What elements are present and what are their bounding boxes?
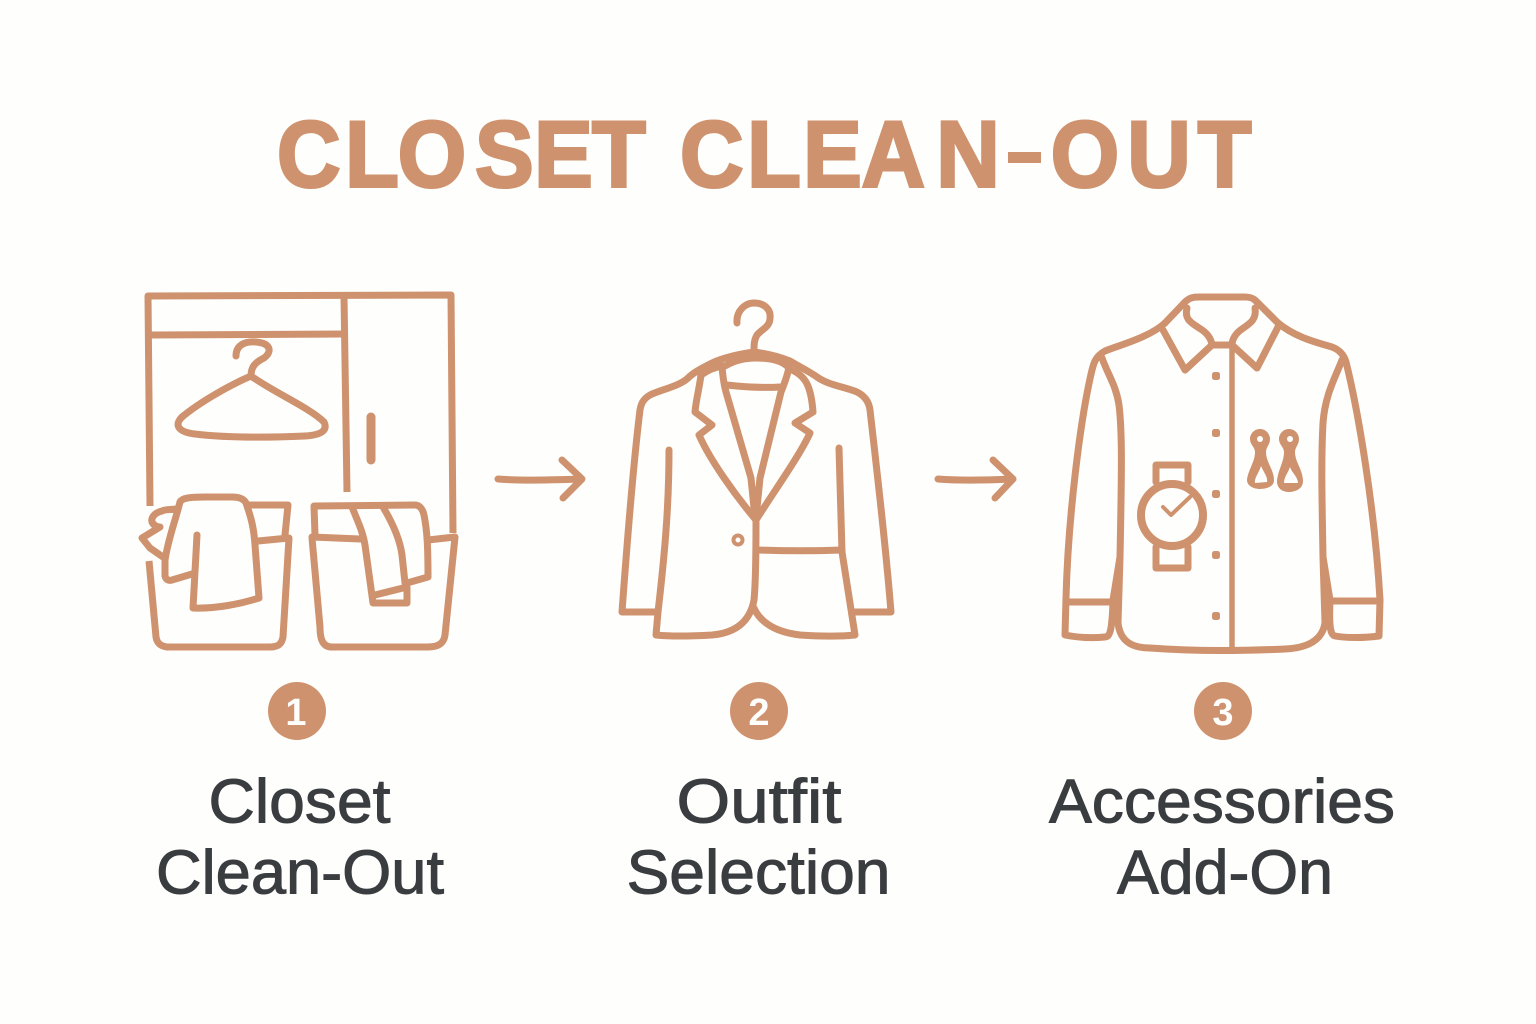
- title: [277, 103, 1251, 207]
- icon: shirt collar: [1163, 297, 1278, 370]
- step badge 1: [268, 682, 326, 740]
- label: step 2: [626, 768, 890, 908]
- label: step 2: Outfit: [676, 768, 842, 836]
- label: step 3: Accessories: [1049, 768, 1395, 836]
- icon: right basket: [312, 505, 455, 647]
- label: step 1: [156, 768, 444, 908]
- title: N: [936, 103, 1000, 207]
- icon: blazer button: [734, 536, 742, 544]
- icon: shirt with accessories: [1065, 297, 1380, 650]
- label: step 3: [1049, 768, 1395, 908]
- title: CLOSET CLEA: [277, 103, 925, 207]
- arrow: step 1 to step 2: [498, 460, 582, 498]
- icon: shirt buttons: [1212, 372, 1220, 620]
- step badge 3: [1194, 682, 1252, 740]
- icon: right earring: [1277, 429, 1303, 492]
- label: step 2: Selection: [626, 838, 890, 908]
- step badge 2: [730, 682, 788, 740]
- arrow: step 2 to step 3: [938, 460, 1013, 498]
- label: step 3: Add-On: [1117, 838, 1333, 908]
- step badge 2: 2: [748, 692, 770, 734]
- title: -: [1012, 114, 1034, 191]
- icon: blazer hanger: [737, 303, 770, 351]
- step badge 1: 1: [285, 692, 307, 734]
- icon: left basket: [142, 497, 289, 647]
- icon: wristwatch: [1141, 465, 1203, 568]
- label: step 1: Clean-Out: [156, 838, 444, 908]
- label: step 1: Closet: [208, 768, 390, 836]
- icon: hanger in closet: [178, 342, 325, 437]
- icon: blazer on hanger: [622, 303, 891, 636]
- icon: left earring: [1247, 429, 1274, 489]
- icon: closet with hanger and baskets: [142, 295, 455, 647]
- title: OUT: [1051, 103, 1251, 207]
- step badge 3: 3: [1212, 692, 1234, 734]
